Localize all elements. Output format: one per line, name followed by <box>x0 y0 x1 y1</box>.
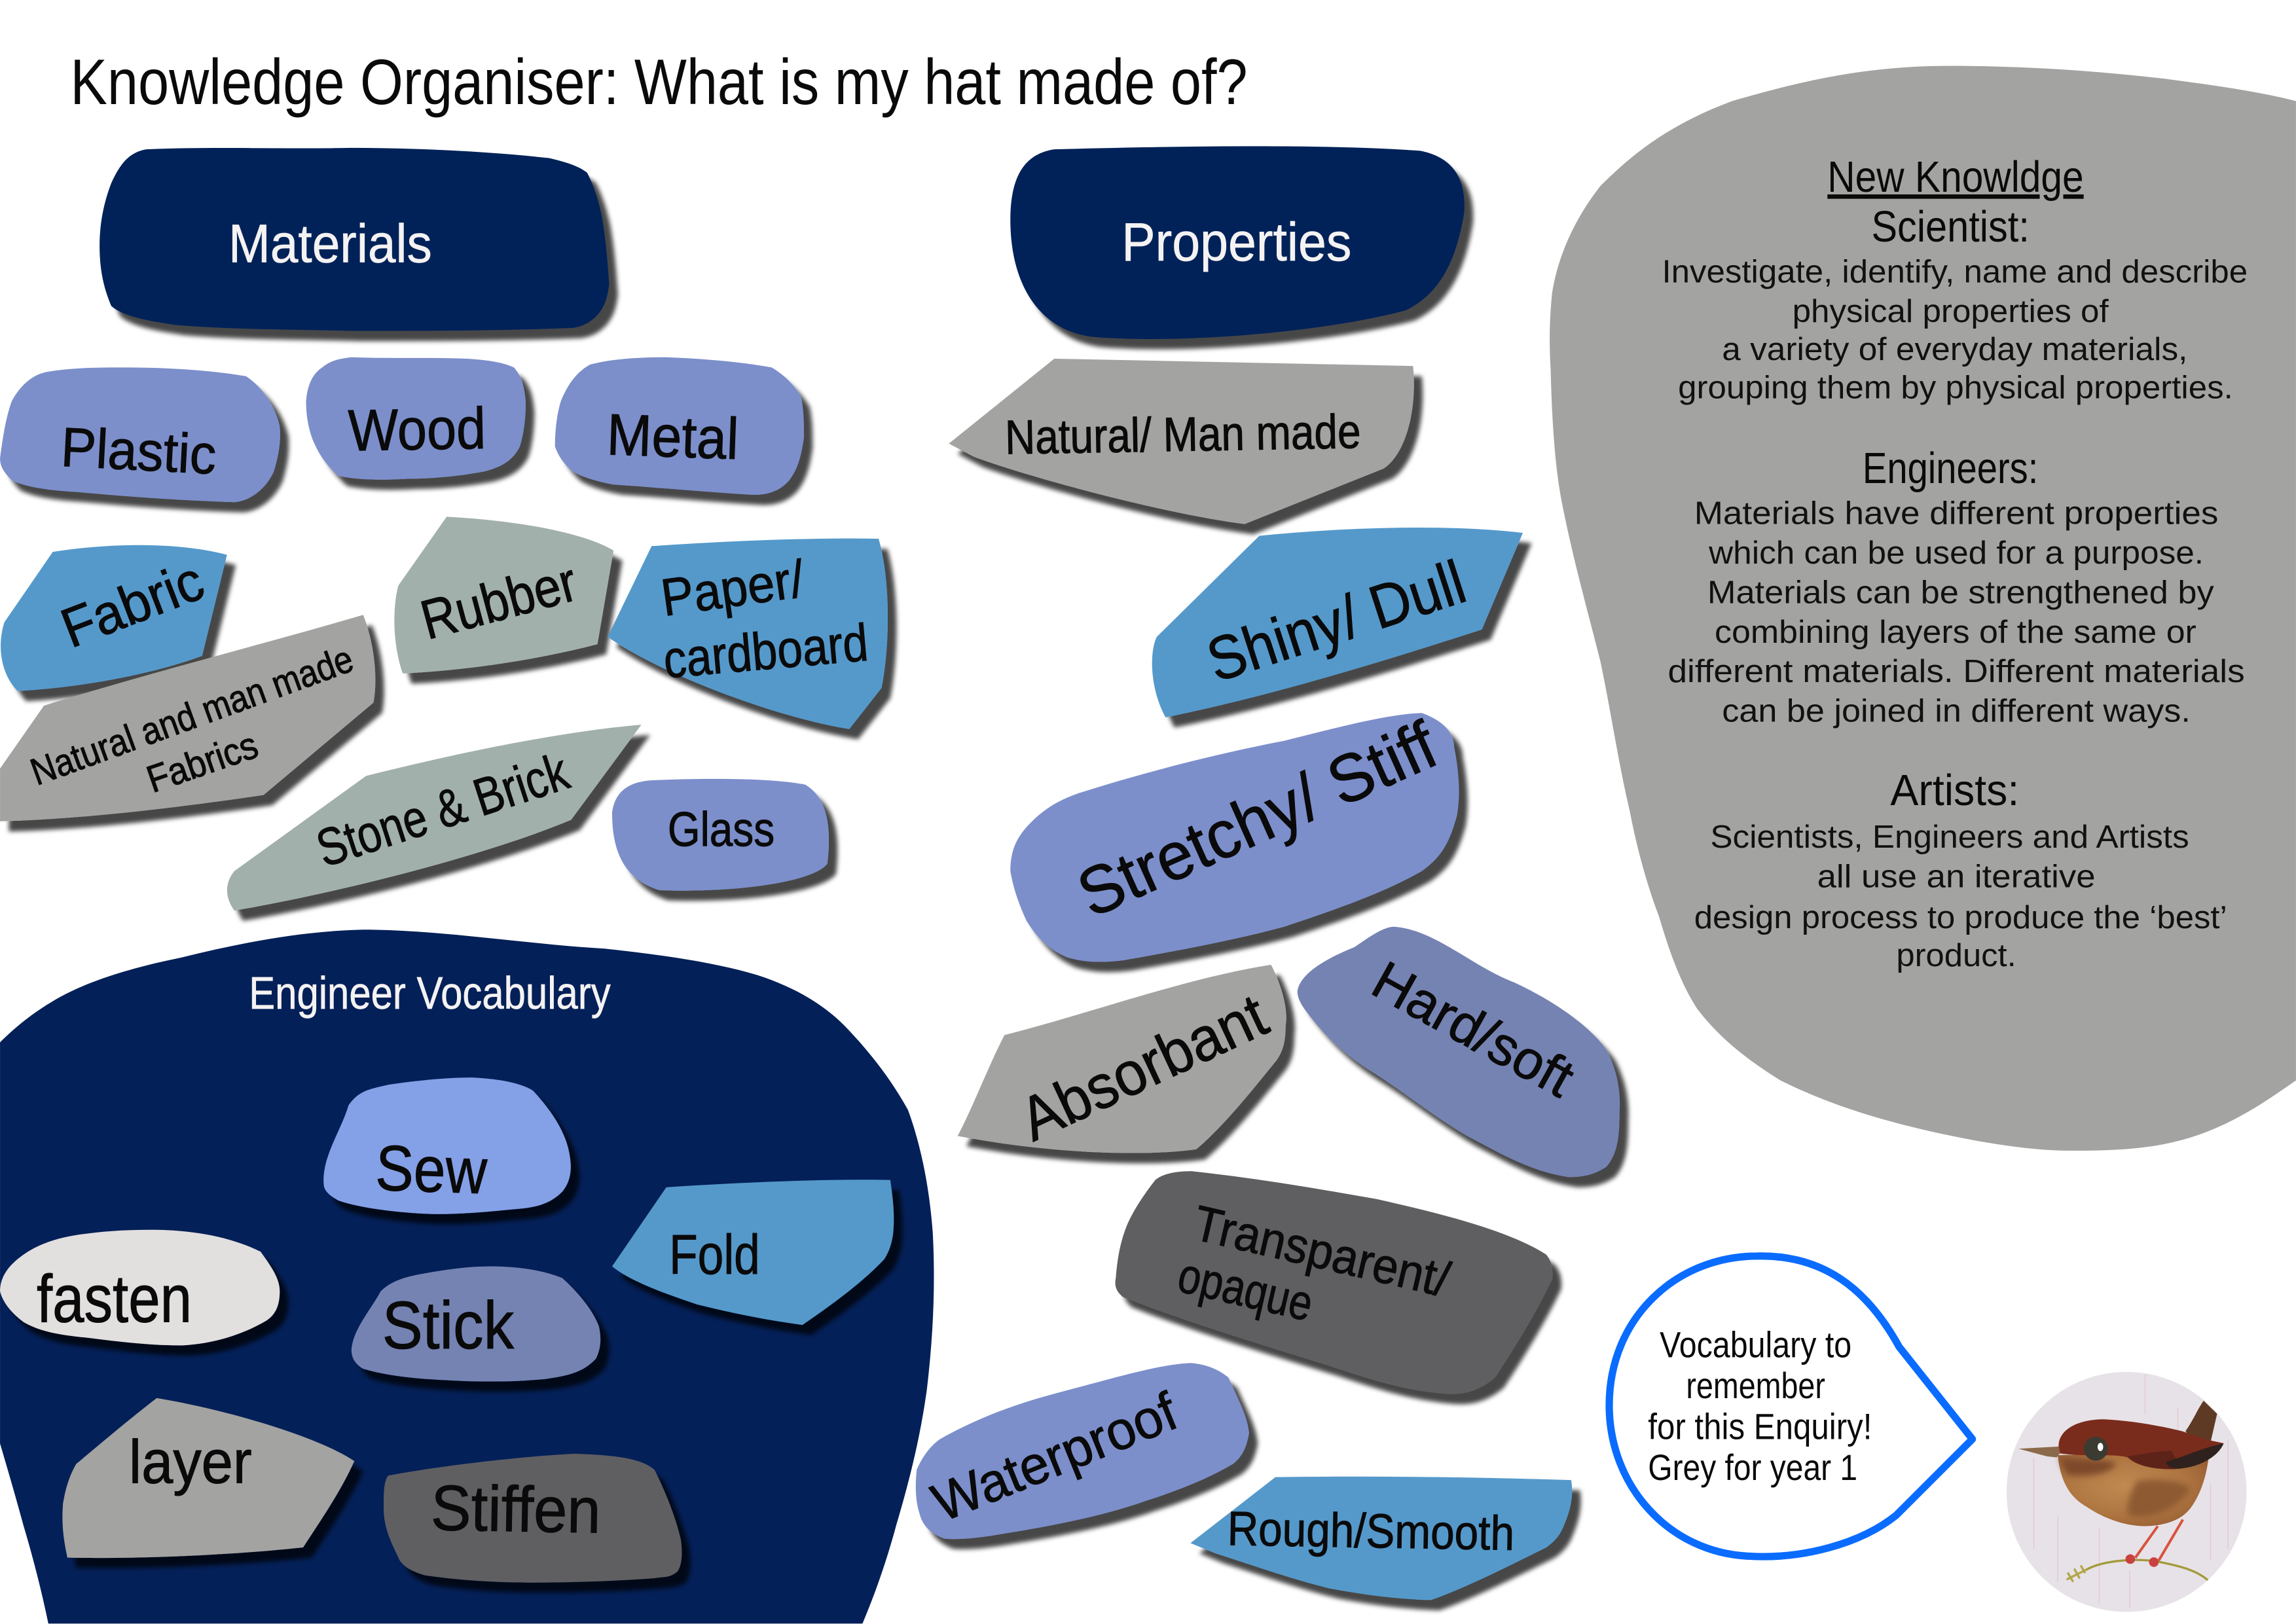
chip: absorbant: Absorbant <box>1010 980 1277 1154</box>
text block: artists: design process to produce the ‘best’ <box>1694 899 2227 935</box>
panel: materials heading: Materials <box>228 213 432 274</box>
chip: waterproof: Waterproof <box>924 1380 1186 1534</box>
chip: rough / smooth: Rough/Smooth <box>1227 1501 1515 1561</box>
text block: artists: product. <box>1896 937 2016 973</box>
callout: vocabulary to remember: remember <box>1686 1365 1825 1406</box>
chip: rubber: Rubber <box>414 550 583 652</box>
chip: hard / soft: Hard/soft <box>1362 949 1584 1109</box>
callout: vocabulary to remember: for this Enquiry! <box>1648 1406 1872 1447</box>
chip: plastic: Plastic <box>60 416 218 486</box>
chip: rough / smooth <box>1190 1477 1572 1600</box>
chip: stone and brick <box>227 725 642 911</box>
heading: engineer vocabulary: Engineer Vocabulary <box>249 967 611 1019</box>
chip: hard / soft <box>1298 927 1620 1177</box>
chip: paper / cardboard <box>608 539 888 729</box>
chip: stick: Stick <box>382 1288 515 1363</box>
callout: vocabulary to remember <box>1609 1256 1973 1557</box>
chip: rubber <box>394 517 613 674</box>
chip: fasten <box>0 1230 280 1345</box>
panel: new knowledge <box>1550 66 2296 1151</box>
chip: fold <box>612 1180 894 1325</box>
chip: stone and brick: Stone & Brick <box>310 742 576 878</box>
text block: artists: Scientists, Engineers and Artists <box>1710 819 2189 855</box>
chip: paper / cardboard: cardboard <box>661 613 871 690</box>
text block: scientist: grouping them by physical properties. <box>1678 369 2233 405</box>
chip: shiny / dull <box>1152 528 1523 717</box>
text block: scientist: a variety of everyday materials, <box>1722 331 2187 367</box>
chip: natural / man made <box>949 359 1414 524</box>
chip: transparent / opaque: Transparent/ <box>1188 1195 1455 1308</box>
text block: scientist: Investigate, identify, name and describe <box>1662 254 2248 290</box>
chip: layer <box>62 1398 354 1558</box>
panel: properties heading: Properties <box>1121 211 1351 272</box>
chip: sew <box>323 1077 571 1214</box>
chip: natural and man made fabrics: Natural and man made <box>25 638 359 794</box>
text block: engineers: different materials. Different materials <box>1667 653 2245 689</box>
chip: stiffen <box>384 1454 682 1583</box>
heading: new knowledge: New Knowldge <box>1827 153 2084 202</box>
chip: paper / cardboard: Paper/ <box>657 549 808 628</box>
text block: artists: all use an iterative <box>1817 858 2096 894</box>
chip: metal <box>555 357 804 495</box>
callout: vocabulary to remember: Grey for year 1 <box>1648 1447 1857 1488</box>
text block: scientist <box>1662 254 2248 405</box>
chip: fabric <box>1 545 227 691</box>
chip: sew: Sew <box>374 1132 488 1208</box>
panel: materials heading <box>100 148 609 331</box>
chip: fasten: fasten <box>37 1261 192 1337</box>
chip: stick <box>352 1267 600 1382</box>
icon: bird <box>2007 1372 2246 1612</box>
text block: artists <box>1694 819 2227 973</box>
chip: fabric: Fabric <box>53 550 212 660</box>
chip: transparent / opaque <box>1116 1171 1553 1394</box>
chip: natural / man made: Natural/ Man made <box>1004 404 1361 465</box>
text block: engineers: can be joined in different ways. <box>1722 693 2191 729</box>
text block: engineers: combining layers of the same or <box>1715 614 2196 650</box>
title: Knowledge Organiser: What is my hat made of? <box>70 46 1248 118</box>
text block: scientist: physical properties of <box>1793 293 2109 329</box>
panel: properties heading <box>1010 146 1465 339</box>
chip: glass: Glass <box>668 803 774 857</box>
text block: engineers <box>1667 496 2245 729</box>
text block: engineers: which can be used for a purpose. <box>1708 535 2204 571</box>
panel: engineer vocabulary <box>0 929 934 1623</box>
callout: vocabulary to remember: Vocabulary to <box>1660 1324 1851 1365</box>
chip: natural and man made fabrics: Fabrics <box>141 724 263 801</box>
chip: layer: layer <box>129 1428 252 1496</box>
heading: engineers: Engineers: <box>1863 444 2038 493</box>
chip: wood: Wood <box>348 395 486 463</box>
chip: stretchy / stiff: Stretchy/ Stiff <box>1066 706 1448 931</box>
chip: glass <box>612 779 829 891</box>
text block: engineers: Materials can be strengthened by <box>1707 574 2214 610</box>
chip: shiny / dull: Shiny/ Dull <box>1199 547 1474 695</box>
chip: metal: Metal <box>606 401 740 471</box>
heading: scientist: Scientist: <box>1871 202 2030 251</box>
chip: transparent / opaque: opaque <box>1173 1247 1318 1332</box>
chip: plastic <box>0 367 280 502</box>
text block: engineers: Materials have different properties <box>1694 496 2218 532</box>
heading: artists: Artists: <box>1890 766 2019 815</box>
chip: stiffen: Stiffen <box>430 1471 602 1547</box>
chip: wood <box>306 357 526 480</box>
chip: fold: Fold <box>669 1224 760 1286</box>
